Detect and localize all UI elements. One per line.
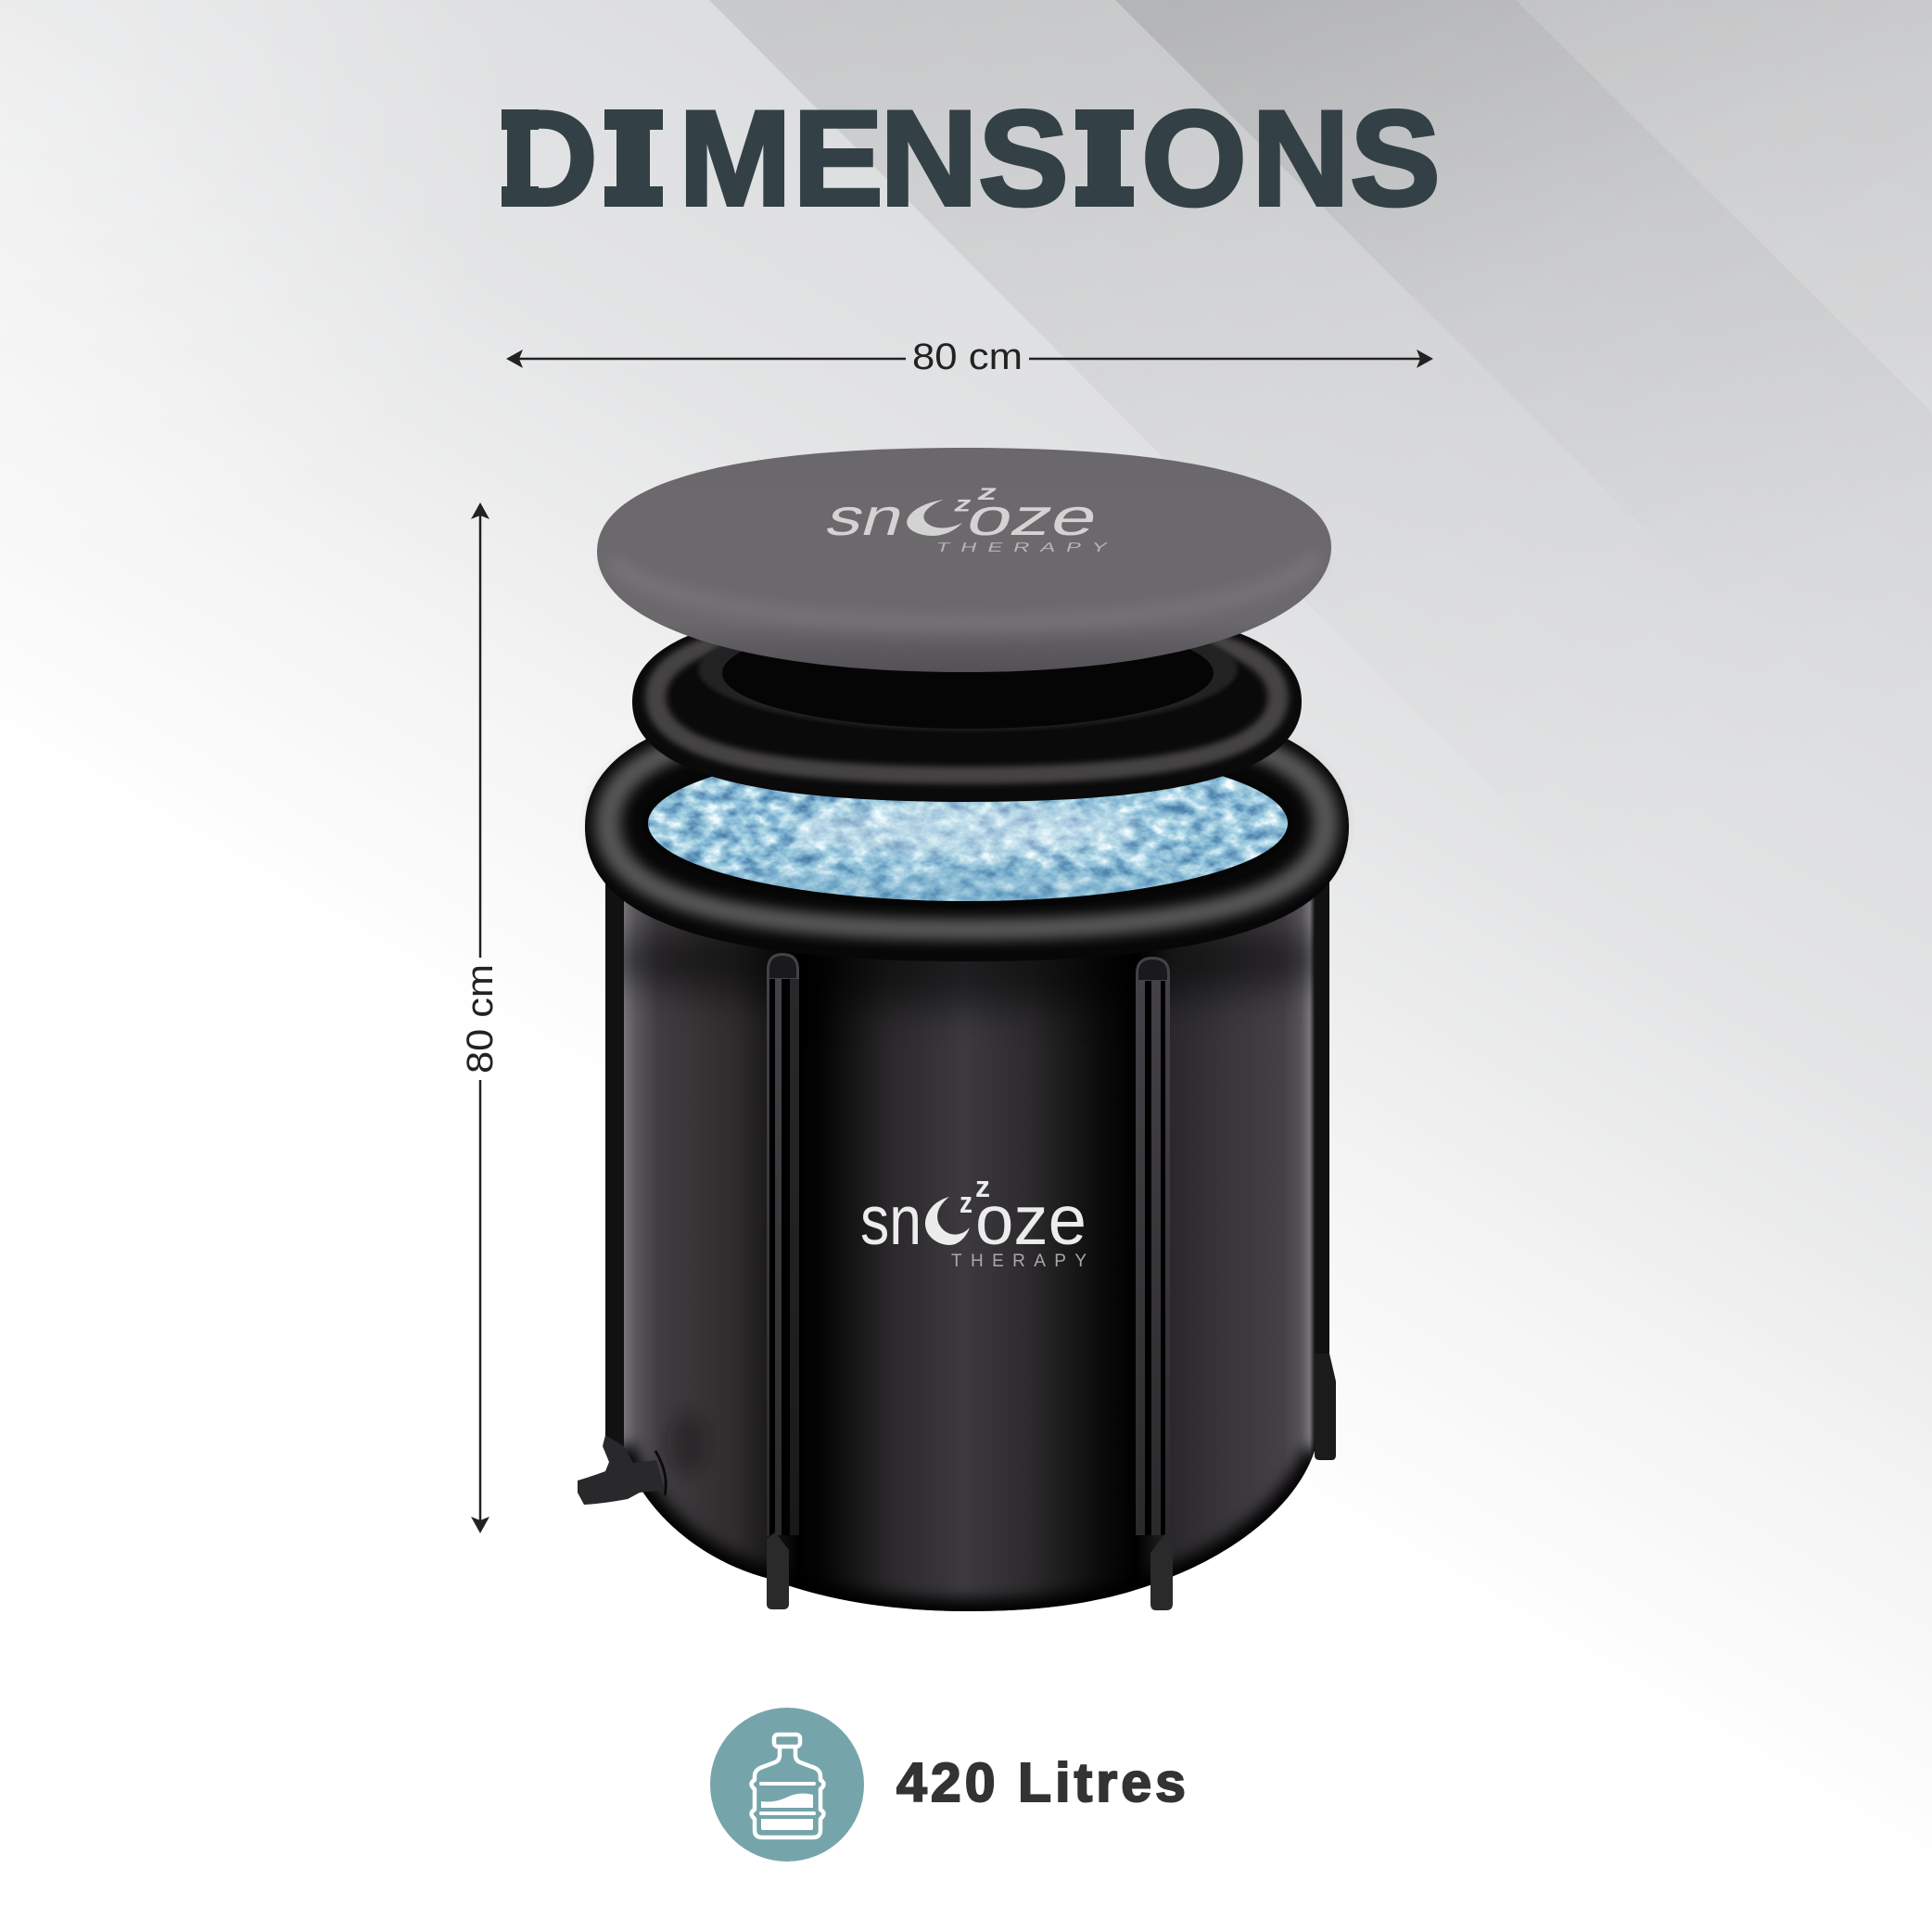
ice surface <box>648 776 1288 901</box>
right front pole <box>1136 957 1173 1610</box>
left front pole <box>767 953 799 1609</box>
width arrow <box>506 337 1433 377</box>
lid logo: z <box>951 492 975 516</box>
lid logo: z <box>974 480 1000 505</box>
ice bath tub <box>578 448 1349 1611</box>
body logo: z <box>960 1186 972 1219</box>
back support poles <box>605 862 1336 1460</box>
icon: water bottle <box>710 1708 864 1862</box>
lid <box>597 448 1331 672</box>
volume label: 420 Litres <box>896 1752 1186 1813</box>
width arrow: 80 cm <box>912 337 1023 377</box>
title: DIMENSIONS <box>500 83 1441 234</box>
lid logo: THERAPY <box>934 540 1109 555</box>
body logo <box>860 1170 1087 1271</box>
lid logo: sn <box>820 488 912 546</box>
body logo: sn <box>860 1181 922 1259</box>
lower rim ring <box>585 693 1349 961</box>
height arrow <box>460 502 501 1533</box>
lid logo <box>818 480 1126 555</box>
drain tap <box>578 1435 666 1505</box>
body logo: z <box>975 1170 990 1203</box>
height arrow: 80 cm <box>460 964 501 1074</box>
body logo: THERAPY <box>951 1252 1087 1271</box>
tub body <box>598 890 1340 1611</box>
lid logo: oze <box>960 488 1106 546</box>
upper ring <box>632 602 1302 802</box>
body logo: oze <box>975 1181 1087 1259</box>
